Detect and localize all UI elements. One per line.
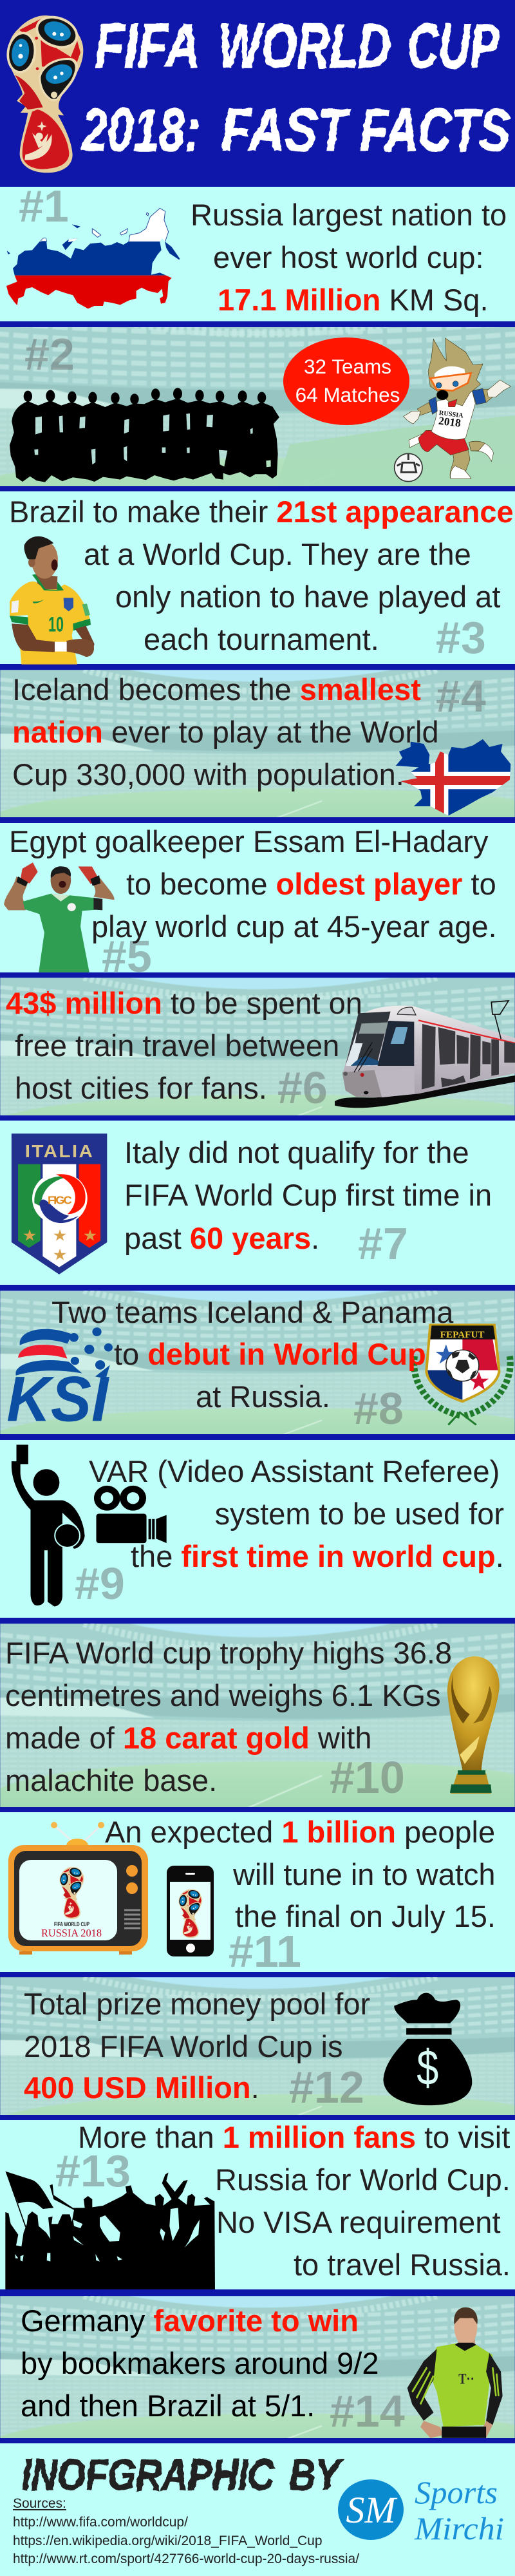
number 8: #8 — [353, 1383, 404, 1434]
panel 5: Egypt oldest player — [0, 823, 515, 981]
fact text: Two teams Iceland & Panama — [52, 1295, 454, 1329]
number 7: #7 — [358, 1218, 408, 1269]
icon: mascot Zabivaka with ball: RUSSIA — [438, 410, 464, 420]
fact text: 2018 FIFA World Cup is — [24, 2029, 342, 2063]
fact text: 400 USD Million. — [24, 2070, 259, 2105]
footer panel — [0, 2443, 515, 2576]
fact text — [9, 495, 514, 656]
icon: Iceland map in flag colours — [396, 739, 511, 815]
fact text: centimetres and weighs 6.1 KGs — [5, 1678, 441, 1712]
icon: Brazil player in yellow shirt — [10, 536, 95, 665]
fact text: Russia largest nation to — [191, 198, 507, 232]
callout: 32 teams 64 matches: 32 Teams — [304, 355, 391, 378]
panel 10: trophy facts — [0, 1624, 515, 1812]
icon: smartphone with logo — [167, 1866, 214, 1956]
icon: Sports Mirchi SM logo: SM — [346, 2489, 397, 2531]
fact text: will tune in to watch — [232, 1857, 496, 1891]
number 2: #2 — [24, 329, 75, 379]
icon: Italy FIGC badge: ★ — [23, 1226, 37, 1244]
panel 7: Italy did not qualify — [0, 1121, 515, 1285]
sources list: http://www.rt.com/sport/427766-world-cup-20-days-russia/ — [13, 2552, 359, 2566]
fact text: to debut in World Cup — [114, 1337, 426, 1371]
fact text: No VISA requirement — [216, 2205, 501, 2239]
number 14: #14 — [330, 2386, 405, 2436]
icon: Italy FIGC badge: FIGC — [48, 1194, 72, 1206]
fact text: FIFA World Cup first time in — [124, 1178, 492, 1212]
fact text: An expected 1 billion people — [105, 1815, 495, 1849]
fact text: made of 18 carat gold with — [5, 1721, 371, 1755]
icon: FIFA World Cup 2018 logo — [4, 10, 83, 173]
fact text: to travel Russia. — [294, 2248, 510, 2282]
icon: Italy FIGC badge: ★ — [53, 1226, 68, 1244]
fact text — [24, 1987, 370, 2105]
icon: Germany goalkeeper in lime shirt — [407, 2307, 503, 2438]
panel 14: Germany favorite — [0, 2296, 515, 2457]
fact text: free train travel between — [15, 1028, 339, 1063]
panel 3: Brazil 21st appearance — [0, 491, 515, 665]
fact text: 17.1 Million KM Sq. — [218, 283, 489, 317]
fact text — [191, 198, 507, 317]
fact text: at a World Cup. They are the — [84, 537, 471, 571]
title: 2018: — [80, 96, 200, 164]
fact text: nation ever to play at the World — [12, 715, 439, 749]
brand name: Sports Mirchi: Mirchi — [414, 2510, 504, 2546]
fact text: system to be used for — [215, 1497, 504, 1531]
fact text: only nation to have played at — [115, 580, 500, 614]
fact text — [6, 986, 362, 1105]
fact text — [21, 2304, 379, 2423]
title: WORLD — [218, 10, 391, 81]
fact text — [12, 672, 439, 791]
icon: money bag: $ — [417, 2040, 438, 2096]
icon: FIFA World Cup trophy — [447, 1656, 500, 1794]
fact text: the first time in world cup. — [131, 1539, 504, 1573]
sources list: http://www.fifa.com/worldcup/ — [13, 2515, 188, 2530]
brand name: Sports Mirchi — [414, 2474, 504, 2546]
fact text: Egypt goalkeeper Essam El-Hadary — [9, 824, 489, 858]
fact text: and then Brazil at 5/1. — [21, 2389, 315, 2423]
panel 13: 1 million fans — [0, 2120, 515, 2289]
icon: Italy FIGC badge: ITALIA — [25, 1142, 93, 1162]
title: FIFA — [95, 10, 200, 81]
icon: retro TV with logo: RUSSIA 2018 — [41, 1927, 102, 1939]
number 5: #5 — [102, 931, 152, 981]
icon: crowd silhouette with flag — [5, 2172, 215, 2289]
callout: 32 teams 64 matches: 64 Matches — [295, 383, 400, 406]
fact text: 43$ million to be spent on — [6, 986, 362, 1020]
number 1: #1 — [19, 181, 69, 231]
icon: tram train — [335, 1001, 515, 1108]
credit heading: BY — [289, 2450, 343, 2499]
number 12: #12 — [289, 2062, 364, 2112]
fact text: play world cup at 45-year age. — [91, 909, 497, 943]
icon: Germany goalkeeper in lime shirt: T·· — [458, 2371, 474, 2387]
icon: Sports Mirchi SM logo — [338, 2479, 404, 2540]
fact text: Italy did not qualify for the — [124, 1135, 469, 1170]
icon: money bag — [383, 1993, 472, 2105]
brand name: Sports Mirchi: Sports — [415, 2474, 498, 2510]
fact text: More than 1 million fans to visit — [78, 2120, 510, 2154]
icon: mascot Zabivaka with ball: 2018 — [438, 415, 462, 430]
panel 8: Iceland and Panama debut — [0, 1291, 515, 1452]
fact text: malachite base. — [5, 1763, 217, 1797]
sources list: https://en.wikipedia.org/wiki/2018_FIFA_World_Cup — [13, 2533, 323, 2548]
fact text: FIFA World cup trophy highs 36.8 — [5, 1636, 452, 1670]
icon: KSI Iceland football logo — [6, 1327, 113, 1435]
panel 1: Russia largest host — [0, 181, 515, 321]
fact text: Brazil to make their 21st appearance — [9, 495, 514, 529]
number 9: #9 — [75, 1558, 125, 1609]
sources list: Sources: — [13, 2496, 66, 2511]
icon: Italy FIGC badge: ★ — [83, 1226, 97, 1244]
fact text: at Russia. — [196, 1379, 330, 1414]
icon: Brazil player in yellow shirt: 10 — [48, 613, 64, 636]
number 3: #3 — [436, 612, 486, 663]
fact text — [89, 1454, 504, 1573]
icon: KSI Iceland football logo: KSI — [6, 1363, 110, 1435]
fact text: Russia for World Cup. — [215, 2163, 510, 2197]
fact text: the final on July 15. — [235, 1899, 496, 1933]
fact text — [124, 1135, 492, 1255]
fact text: past 60 years. — [124, 1221, 319, 1255]
fact text: Iceland becomes the smallest — [12, 672, 421, 706]
title: FAST — [221, 96, 351, 164]
team silhouette — [10, 388, 279, 482]
icon: mascot Zabivaka with ball — [395, 338, 510, 482]
icon: Panama FEPAFUT badge — [414, 1325, 510, 1425]
panel 12: prize money — [0, 1977, 515, 2137]
fact text — [105, 1815, 496, 1933]
icon: referee holding a card and ball — [12, 1444, 85, 1606]
credit heading: INOFGRAPHIC — [21, 2450, 275, 2499]
sources list — [13, 2496, 359, 2566]
fact text — [9, 824, 497, 943]
number 10: #10 — [330, 1752, 405, 1803]
fact text — [52, 1295, 454, 1414]
number 13: #13 — [55, 2146, 131, 2196]
panel 2: teams and matches — [0, 307, 515, 514]
fact text: by bookmakers around 9/2 — [21, 2346, 379, 2380]
icon: retro TV with logo: FIFA WORLD CUP — [54, 1921, 89, 1928]
icon: Egypt goalkeeper in green — [4, 862, 115, 972]
fact text: ever host world cup: — [213, 240, 484, 274]
fact text — [5, 1636, 452, 1797]
fact text: Germany favorite to win — [21, 2304, 359, 2338]
panel 9: VAR — [0, 1440, 515, 1618]
icon: Italy FIGC badge — [12, 1133, 107, 1274]
icon: video camera — [94, 1486, 167, 1543]
icon: Russia map in flag colours — [6, 207, 180, 309]
number 4: #4 — [436, 671, 486, 721]
number 11: #11 — [229, 1926, 301, 1976]
panel 6: free train travel — [0, 978, 515, 1138]
fact text — [78, 2120, 510, 2282]
icon: Panama FEPAFUT badge: FEPAFUT — [440, 1330, 485, 1340]
panel 4: Iceland smallest nation — [0, 670, 515, 833]
callout: 32 teams 64 matches — [283, 337, 409, 425]
fact text: host cities for fans. — [15, 1071, 267, 1105]
icon: retro TV with logo — [8, 1822, 148, 1955]
fact text: Total prize money pool for — [24, 1987, 370, 2021]
fact text: Cup 330,000 with population. — [12, 757, 404, 791]
title — [80, 10, 510, 164]
fact text: each tournament. — [144, 622, 379, 656]
panel 11: 1 billion viewers — [0, 1812, 515, 1976]
fact text: to become oldest player to — [126, 867, 496, 901]
number 6: #6 — [277, 1063, 328, 1113]
icon: Italy FIGC badge: ★ — [53, 1245, 68, 1264]
header panel — [0, 0, 515, 187]
fact text: VAR (Video Assistant Referee) — [89, 1454, 500, 1488]
